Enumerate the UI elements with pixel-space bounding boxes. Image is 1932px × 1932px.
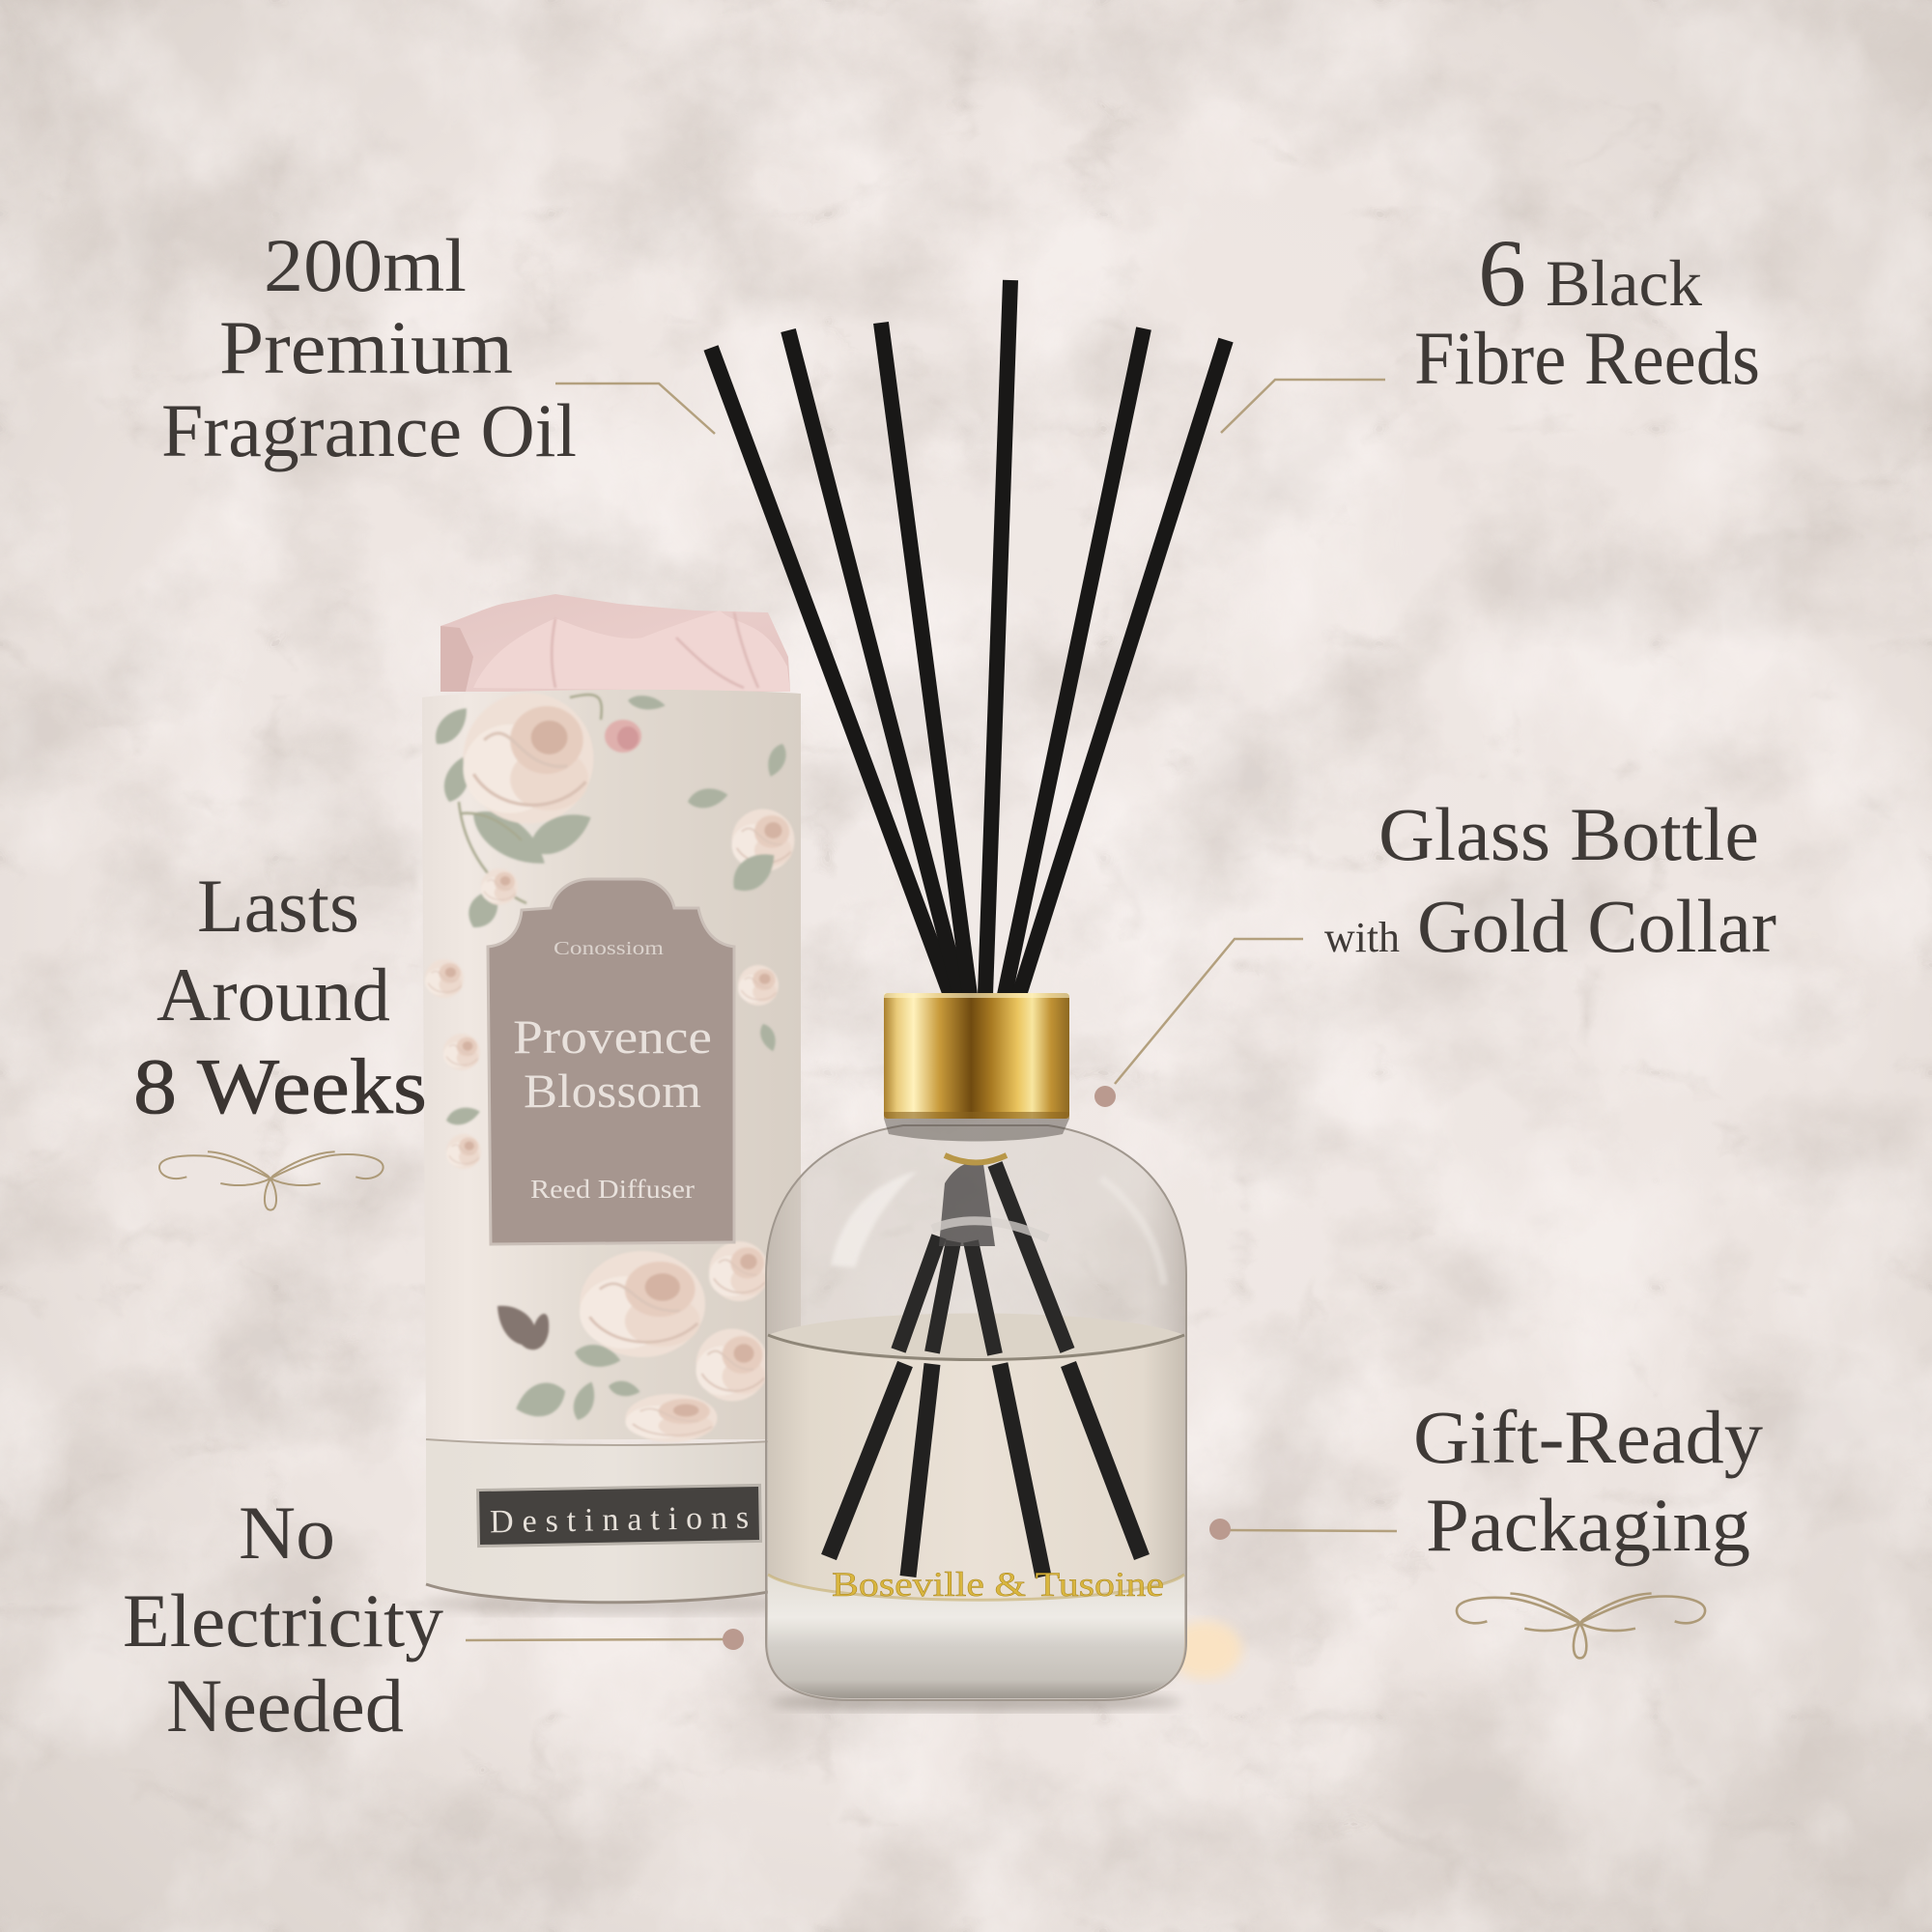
reeds above bottle (711, 280, 1226, 995)
callout: no electricity needed (123, 1491, 744, 1747)
marker dot (1094, 1086, 1116, 1107)
callout: lasts around 8 weeks: Around (156, 952, 390, 1037)
callout: no electricity needed: No (239, 1491, 335, 1575)
callout: gift-ready packaging: Gift-Ready (1413, 1395, 1763, 1479)
label text (513, 938, 712, 1204)
gift box cylinder (420, 594, 816, 1615)
product label (488, 879, 734, 1244)
label text: Blossom (524, 1064, 701, 1118)
highlights (831, 1171, 918, 1267)
butterfly leaf (497, 1306, 549, 1350)
marker dot (723, 1629, 744, 1650)
gold collar (884, 993, 1069, 1119)
box base band (426, 1439, 801, 1603)
heavy glass base (768, 1575, 1184, 1698)
callout: no electricity needed: Electricity (123, 1578, 443, 1662)
callout: 6 black fibre reeds: Fibre Reeds (1414, 316, 1760, 400)
bottle (766, 993, 1242, 1712)
callout: glass bottle: Gold Collar (1417, 884, 1776, 968)
oil surface (768, 1314, 1184, 1360)
marker dot (1209, 1519, 1231, 1540)
gold bottle lettering: Boseville & Tusoine (832, 1565, 1164, 1604)
floral artwork (425, 694, 794, 1442)
callout: 200ml fragrance oil: Premium (219, 305, 513, 389)
callout: 6 black fibre reeds: Black (1546, 246, 1702, 320)
callout: 200ml fragrance oil (161, 223, 715, 472)
callout: lasts around 8 weeks: 8 Weeks (133, 1042, 427, 1130)
callout: 6 black fibre reeds (1221, 219, 1760, 433)
box shadow (420, 1592, 816, 1615)
callout: no electricity needed: Needed (166, 1663, 404, 1747)
warm light on table (1169, 1621, 1242, 1679)
callout: glass bottle (1094, 792, 1776, 1107)
bottle neck (884, 1119, 1069, 1142)
callout: gift-ready packaging: Packaging (1426, 1483, 1750, 1567)
label text: Provence (513, 1009, 712, 1064)
glass body (766, 1125, 1186, 1700)
label text: Reed Diffuser (530, 1175, 695, 1204)
oil (768, 1335, 1184, 1600)
box body (422, 690, 801, 1439)
callout: 6 black fibre reeds: 6 (1478, 219, 1526, 327)
callout: 200ml fragrance oil: 200ml (264, 223, 467, 307)
label text: Conossiom (554, 938, 665, 959)
callout: lasts around 8 weeks: Lasts (197, 864, 359, 948)
flourish (1457, 1593, 1705, 1658)
refracted reeds (898, 1164, 1067, 1354)
tissue paper (440, 594, 790, 692)
callout: glass bottle: Glass Bottle (1378, 792, 1759, 876)
callout: glass bottle: with (1324, 914, 1400, 961)
callout: 200ml fragrance oil: Fragrance Oil (161, 388, 577, 472)
callout: lasts around 8 weeks (133, 864, 427, 1210)
Destinations plate: Destinations (490, 1500, 749, 1540)
Destinations plate (478, 1485, 761, 1547)
reeds in oil (829, 1364, 1142, 1577)
flourish (159, 1151, 384, 1210)
callout: gift-ready packaging (1209, 1395, 1763, 1658)
